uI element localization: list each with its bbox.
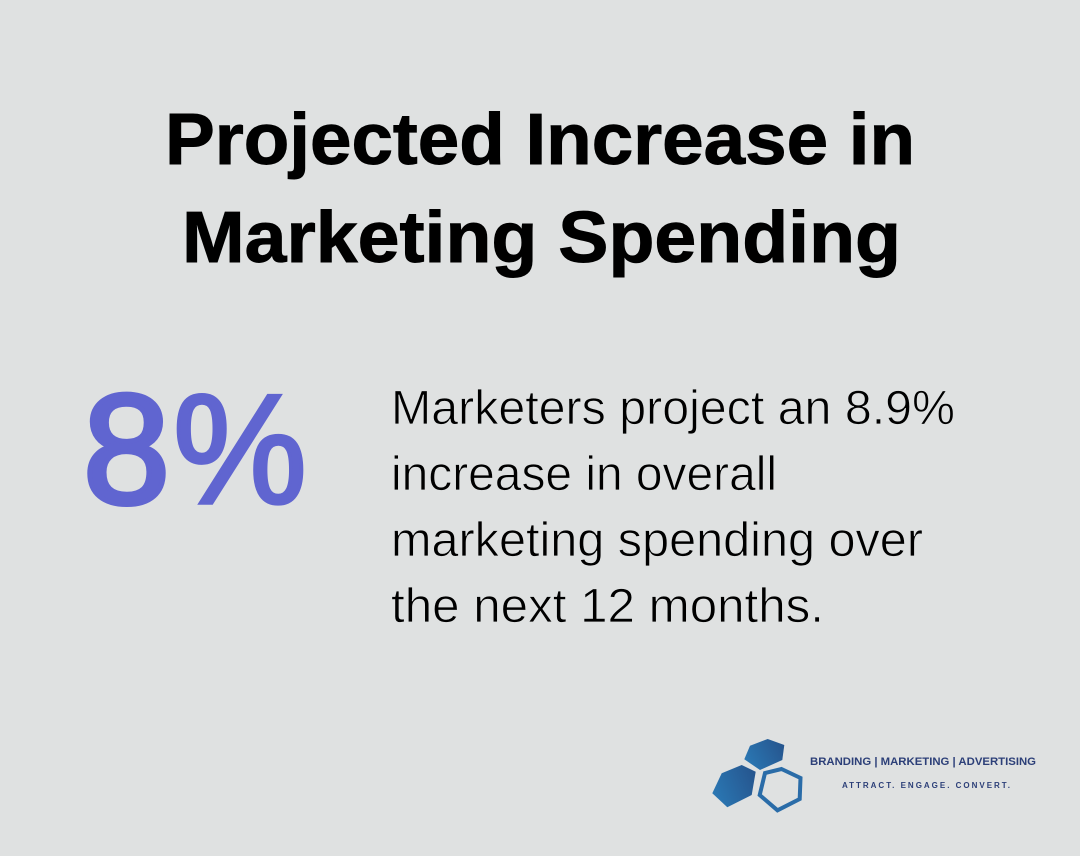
title: Marketing Spending	[182, 198, 901, 278]
description text: Marketers project an 8.9%	[391, 382, 955, 435]
title	[165, 100, 915, 278]
big stat: 8%: %	[173, 363, 307, 537]
description text: the next 12 months.	[391, 580, 824, 633]
logo	[712, 739, 1036, 810]
big stat: 8%	[83, 363, 307, 537]
logo tagline: slogan: ATTRACT. ENGAGE. CONVERT.	[842, 781, 1010, 790]
description text: increase in overall	[391, 448, 777, 501]
description text	[391, 382, 955, 633]
big stat: 8%: 8	[83, 363, 170, 537]
description text: marketing spending over	[391, 514, 923, 567]
logo tagline: services: BRANDING | MARKETING | ADVERTISING	[810, 756, 1036, 768]
icon: three hexagons	[712, 739, 800, 810]
title: Projected Increase in	[165, 100, 915, 180]
